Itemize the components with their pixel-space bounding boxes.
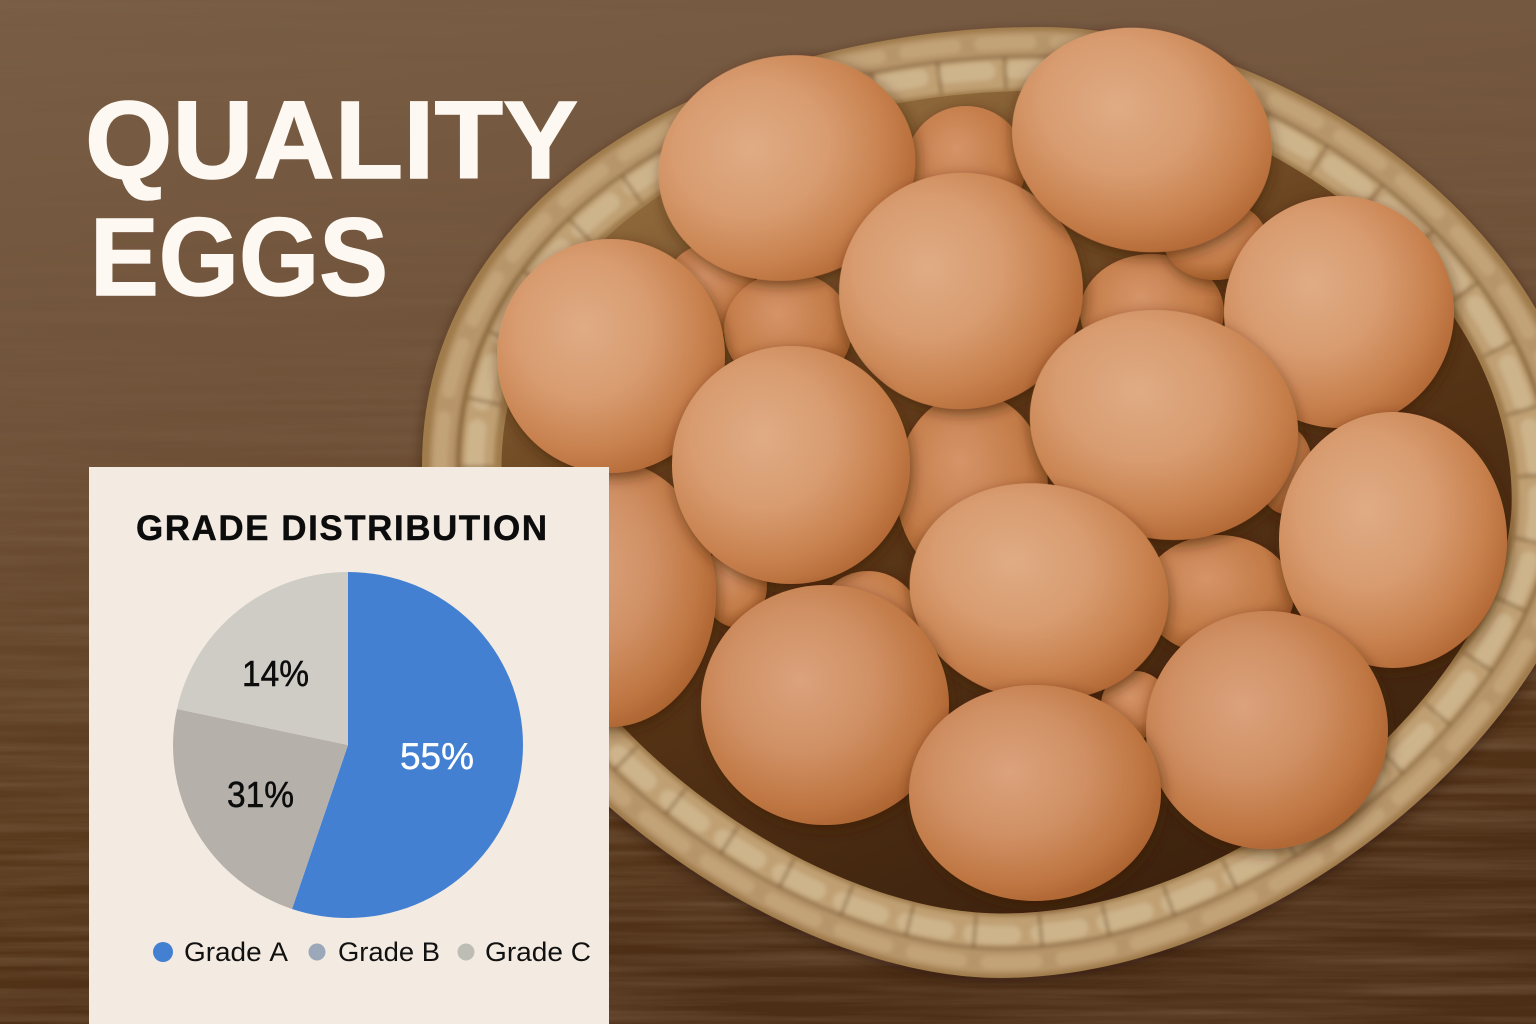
rope strands bbox=[441, 42, 1536, 963]
pie chart bbox=[173, 572, 523, 918]
panel: grade distribution bbox=[89, 467, 609, 1024]
panel heading: GRADE DISTRIBUTION bbox=[136, 509, 547, 548]
basket rim base bbox=[422, 27, 1536, 978]
label: 14%: 14% bbox=[242, 653, 309, 694]
slice: Grade B 31% bbox=[173, 709, 348, 909]
basket cast shadow bbox=[422, 32, 1536, 983]
title: EGGS bbox=[90, 196, 388, 319]
legend item: Grade C: Grade C bbox=[485, 937, 591, 967]
label: 31%: 31% bbox=[227, 774, 294, 815]
slice: Grade A 55% bbox=[292, 572, 523, 918]
title bbox=[85, 79, 578, 319]
eggs at the back of the basket bbox=[664, 106, 1313, 739]
legend item: Grade B: Grade B bbox=[338, 937, 440, 967]
title: QUALITY bbox=[85, 79, 578, 202]
basket interior bbox=[501, 91, 1512, 913]
woven basket bbox=[422, 27, 1536, 983]
eggs at the front of the basket bbox=[497, 1, 1507, 901]
legend item: Grade A: Grade A bbox=[184, 937, 288, 967]
slice: Grade C 14% bbox=[177, 572, 348, 745]
panel background bbox=[89, 467, 609, 1024]
label: 55%: 55% bbox=[400, 736, 474, 777]
legend bbox=[153, 937, 591, 967]
